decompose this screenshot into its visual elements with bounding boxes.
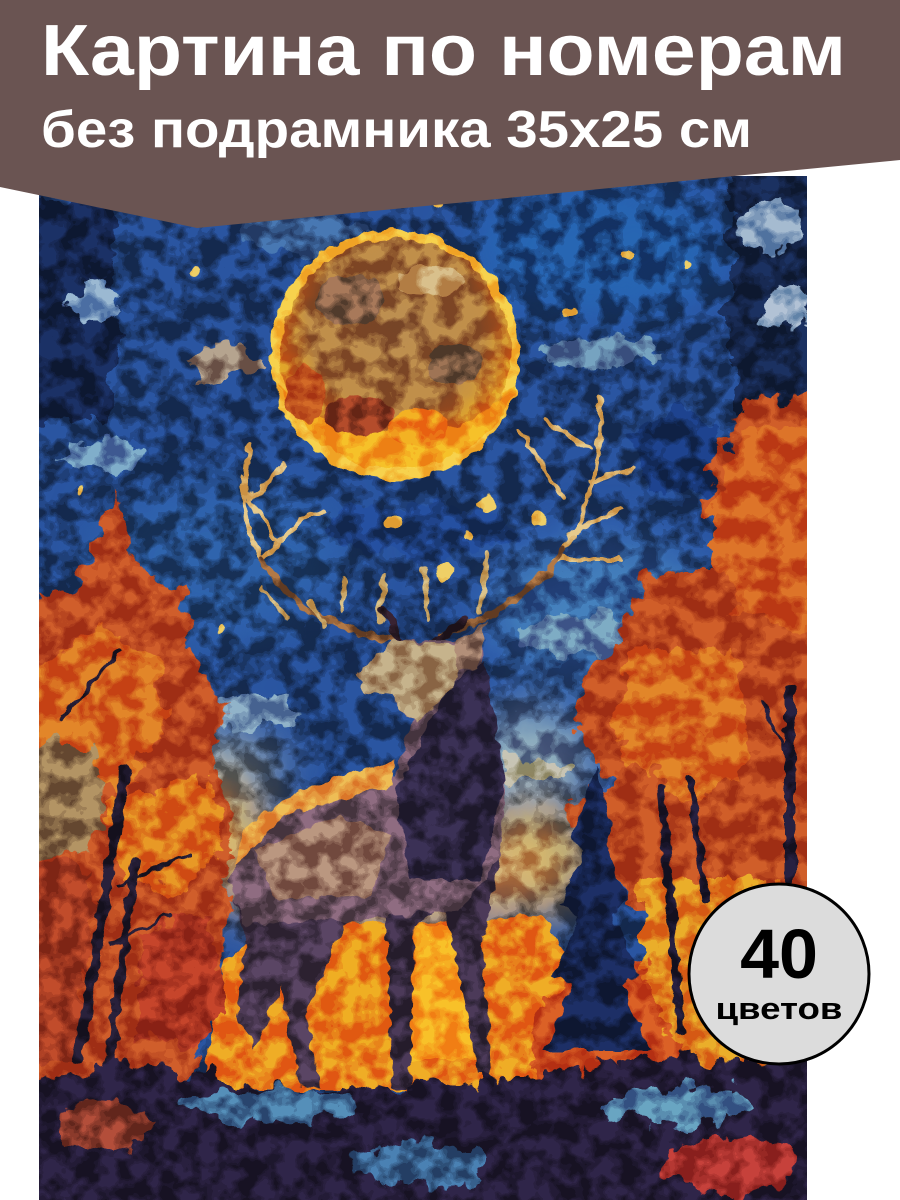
- deer body: [230, 640, 505, 925]
- moon: [270, 230, 520, 480]
- painterly dab texture: [39, 176, 807, 1200]
- badge: 40 colours: 40: [740, 915, 818, 993]
- subtitle: без подрамника 35х25 см: [41, 101, 752, 159]
- painting: deer under the moon in an autumn forest: [39, 176, 807, 1200]
- right tree trunks: [662, 690, 790, 1030]
- deer ear: [455, 622, 485, 672]
- left autumn tree: [39, 489, 235, 1082]
- front legs: [385, 860, 500, 1088]
- deer flank: [255, 815, 392, 900]
- forest floor: [39, 1049, 807, 1200]
- top banner: [0, 0, 900, 228]
- right autumn trees: [528, 391, 807, 1080]
- deer: [230, 622, 505, 1088]
- deer lit back: [232, 758, 395, 870]
- deer head: [356, 638, 459, 722]
- dark fir tree: [545, 765, 650, 1050]
- night sky: [39, 176, 807, 1095]
- left tree trunks: [60, 650, 190, 1080]
- antlers: [240, 395, 630, 640]
- badge: 40 colours: цветов: [716, 991, 842, 1026]
- glow behind the forest: [160, 780, 590, 930]
- sunset orange core: [200, 915, 600, 1090]
- deer dark mane: [395, 660, 505, 880]
- title: Картина по номерам: [41, 11, 846, 91]
- rear legs: [232, 900, 348, 1088]
- glowing stars: [76, 198, 690, 633]
- badge: 40 colours: [689, 884, 869, 1064]
